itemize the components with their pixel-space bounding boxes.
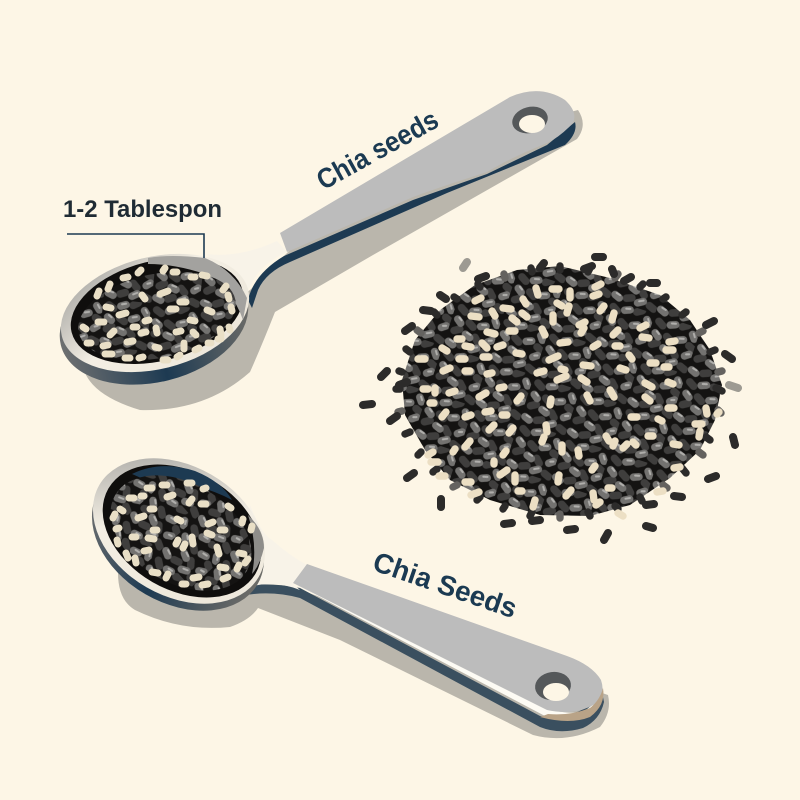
bottom spoon neck <box>240 505 307 590</box>
bottom spoon bowl <box>66 429 291 640</box>
callout line <box>67 234 204 258</box>
bottom spoon handle tip <box>540 688 603 721</box>
pile dark mass <box>402 266 722 516</box>
pile perimeter dark seeds <box>396 266 722 516</box>
heading: 1-2 Tablespon: 1-2 Tablespon <box>63 196 222 223</box>
top spoon seeds <box>70 258 244 374</box>
loose light seeds <box>463 262 738 388</box>
top spoon handle edge <box>248 122 576 308</box>
seed pile <box>363 257 738 540</box>
bottom spoon seeds <box>90 452 272 614</box>
cream seeds <box>418 284 719 516</box>
top spoon handle hole <box>509 103 551 137</box>
bottom spoon <box>66 429 609 738</box>
bottom spoon shadow <box>118 573 609 738</box>
bottom spoon handle <box>293 564 603 712</box>
top spoon handle <box>280 91 574 252</box>
pile perimeter grey seeds <box>398 274 722 518</box>
top spoon neck <box>207 241 287 300</box>
bottom spoon handle rim <box>293 577 603 718</box>
loose dark seeds <box>363 257 735 540</box>
top spoon <box>46 91 583 410</box>
top spoon bowl <box>46 235 262 403</box>
top spoon shadow <box>83 110 583 410</box>
bottom spoon handle hole <box>533 670 573 702</box>
label: Chia seeds top: Chia seeds <box>311 104 444 196</box>
label: Chia Seeds bottom: Chia Seeds <box>369 546 521 624</box>
bottom spoon handle edge <box>240 584 604 731</box>
